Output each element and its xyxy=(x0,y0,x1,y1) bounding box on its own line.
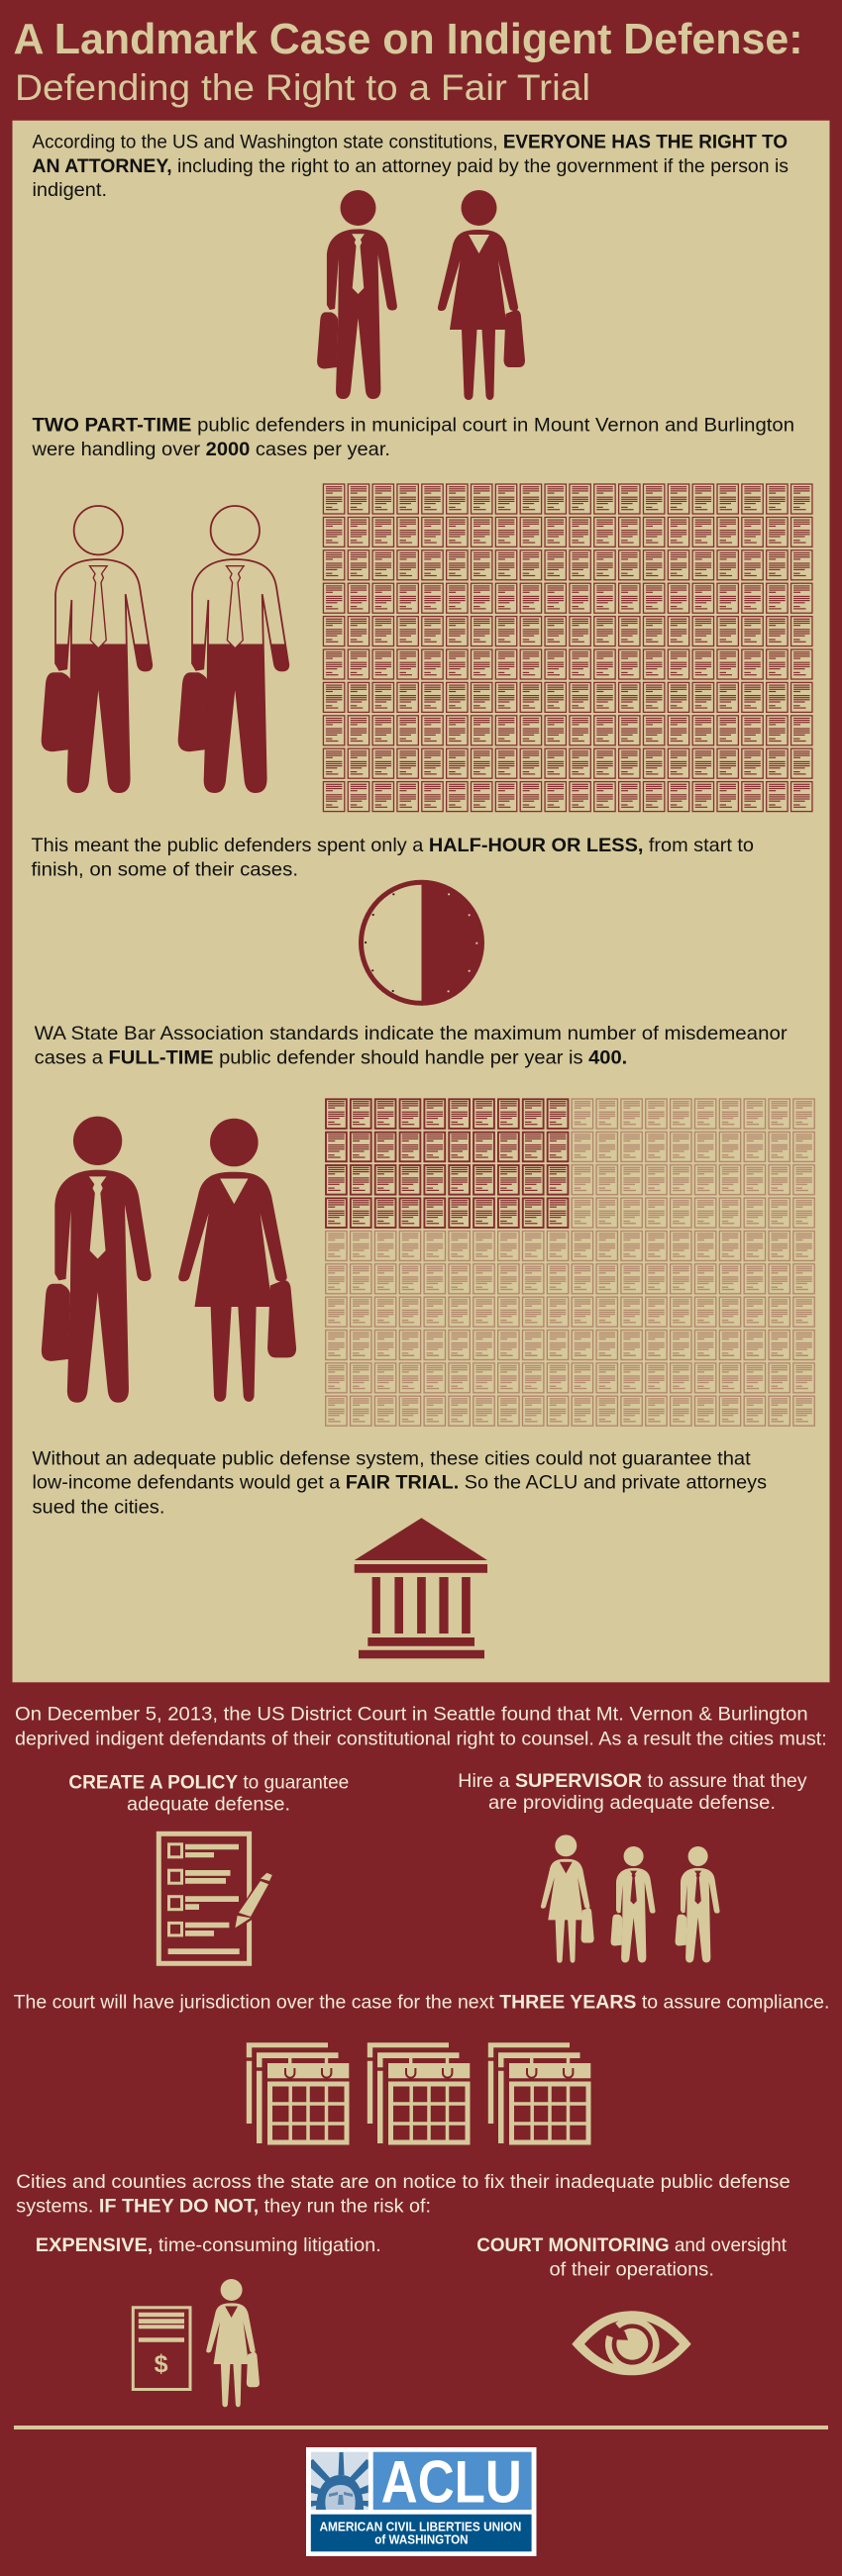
text: right to an attorney: indigent. xyxy=(32,179,107,201)
text: on notice: Cities and counties across the state are on notice to fix their inadequate public defense xyxy=(16,2171,790,2193)
icon: full-time male defender xyxy=(42,1117,152,1403)
chart: 200 case documents (2000 cases) xyxy=(323,484,812,812)
text: court ruling xyxy=(15,1704,827,1749)
icon: woman attorney xyxy=(438,190,525,400)
text: court monitoring: of their operations. xyxy=(549,2259,714,2281)
logo: ACLU wordmark box: ACLU xyxy=(381,2449,522,2516)
text: fair trial xyxy=(32,1447,767,1518)
subtitle: Defending the Right to a Fair Trial xyxy=(15,67,590,108)
logo: organisation name band: AMERICAN CIVIL LIBERTIES UNION xyxy=(319,2521,521,2534)
text: create a policy: adequate defense. xyxy=(127,1794,290,1816)
logo: ACLU of Washington xyxy=(306,2447,537,2556)
text: bar association standard xyxy=(35,1023,788,1068)
divider xyxy=(14,2426,828,2429)
logo: organisation name band xyxy=(311,2515,532,2551)
chart: 400 cases standard, 40 highlighted of 200 documents xyxy=(326,1099,814,1426)
icon: half-hour clock xyxy=(361,880,481,1006)
icon: courthouse xyxy=(355,1518,487,1658)
text: hire a supervisor xyxy=(458,1770,807,1814)
logo: statue of liberty image xyxy=(311,2452,368,2510)
text: half-hour or less: finish, on some of their cases. xyxy=(32,858,298,880)
text: fair trial: sued the cities. xyxy=(32,1496,164,1518)
icon: calendar stack year one xyxy=(247,2042,349,2143)
text: expensive litigation: EXPENSIVE, time-consuming litigation. xyxy=(36,2234,381,2256)
panel: the problem xyxy=(12,121,830,1682)
logo: organisation name band: of WASHINGTON xyxy=(374,2532,469,2546)
text: hire a supervisor: Hire a SUPERVISOR to assure that they xyxy=(458,1770,807,1792)
icon: half-filled part-time defender 1 xyxy=(43,506,152,792)
text: three years jurisdiction: The court will have jurisdiction over the case for the next THREE YEARS to assure compliance. xyxy=(14,1991,829,2013)
text: create a policy: CREATE A POLICY to guarantee xyxy=(68,1772,349,1794)
text: on notice: systems. IF THEY DO NOT, they run the risk of: xyxy=(16,2195,431,2217)
text: court monitoring xyxy=(476,2234,788,2281)
title: A Landmark Case on Indigent Defense: xyxy=(14,15,802,63)
icon: woman with briefcase xyxy=(206,2279,260,2407)
text: create a policy xyxy=(68,1772,349,1816)
icon: full-time female defender xyxy=(178,1119,296,1402)
text: bar association standard: WA State Bar Association standards indicate the maximum number of misdemeanor xyxy=(35,1023,788,1044)
text: fair trial: Without an adequate public defense system, these cities could not guarantee that xyxy=(32,1447,751,1469)
text: fair trial: low-income defendants would get a FAIR TRIAL. So the ACLU and private attorneys xyxy=(32,1472,767,1494)
icon: half-filled part-time defender 2 xyxy=(179,506,288,792)
icon: man attorney xyxy=(317,190,397,399)
icon: eye xyxy=(572,2311,691,2375)
text: two part-time defenders: were handling over 2000 cases per year. xyxy=(31,439,390,460)
text: hire a supervisor: are providing adequate defense. xyxy=(488,1792,776,1814)
icon: legal bill: $ xyxy=(155,2350,168,2378)
text: court monitoring: COURT MONITORING and oversight xyxy=(476,2234,788,2256)
text: half-hour or less: This meant the public defenders spent only a HALF-HOUR OR LESS, from start to xyxy=(32,835,754,856)
icon: legal bill xyxy=(133,2308,190,2390)
text: two part-time defenders xyxy=(31,415,794,460)
text: court ruling: deprived indigent defendants of their constitutional right to counsel. As a result the cities must: xyxy=(15,1728,827,1749)
icon: calendar stack year two xyxy=(368,2042,470,2143)
text: right to an attorney xyxy=(32,131,789,201)
icon: checklist and pencil xyxy=(158,1833,274,1963)
text: right to an attorney: AN ATTORNEY, including the right to an attorney paid by the government if the person is xyxy=(32,155,789,177)
icon: calendar stack year three xyxy=(488,2042,590,2143)
text: bar association standard: cases a FULL-TIME public defender should handle per year is 400. xyxy=(35,1046,627,1068)
text: two part-time defenders: TWO PART-TIME public defenders in municipal court in Mount Vernon and Burlington xyxy=(32,415,794,437)
text: on notice xyxy=(16,2171,790,2217)
text: half-hour or less xyxy=(32,835,754,880)
text: right to an attorney: According to the US and Washington state constitutions, EVERYONE HAS THE RIGHT TO xyxy=(32,131,788,152)
text: court ruling: On December 5, 2013, the US District Court in Seattle found that Mt. Vernon & Burlington xyxy=(15,1704,808,1726)
icon: supervisor team xyxy=(541,1834,720,1963)
